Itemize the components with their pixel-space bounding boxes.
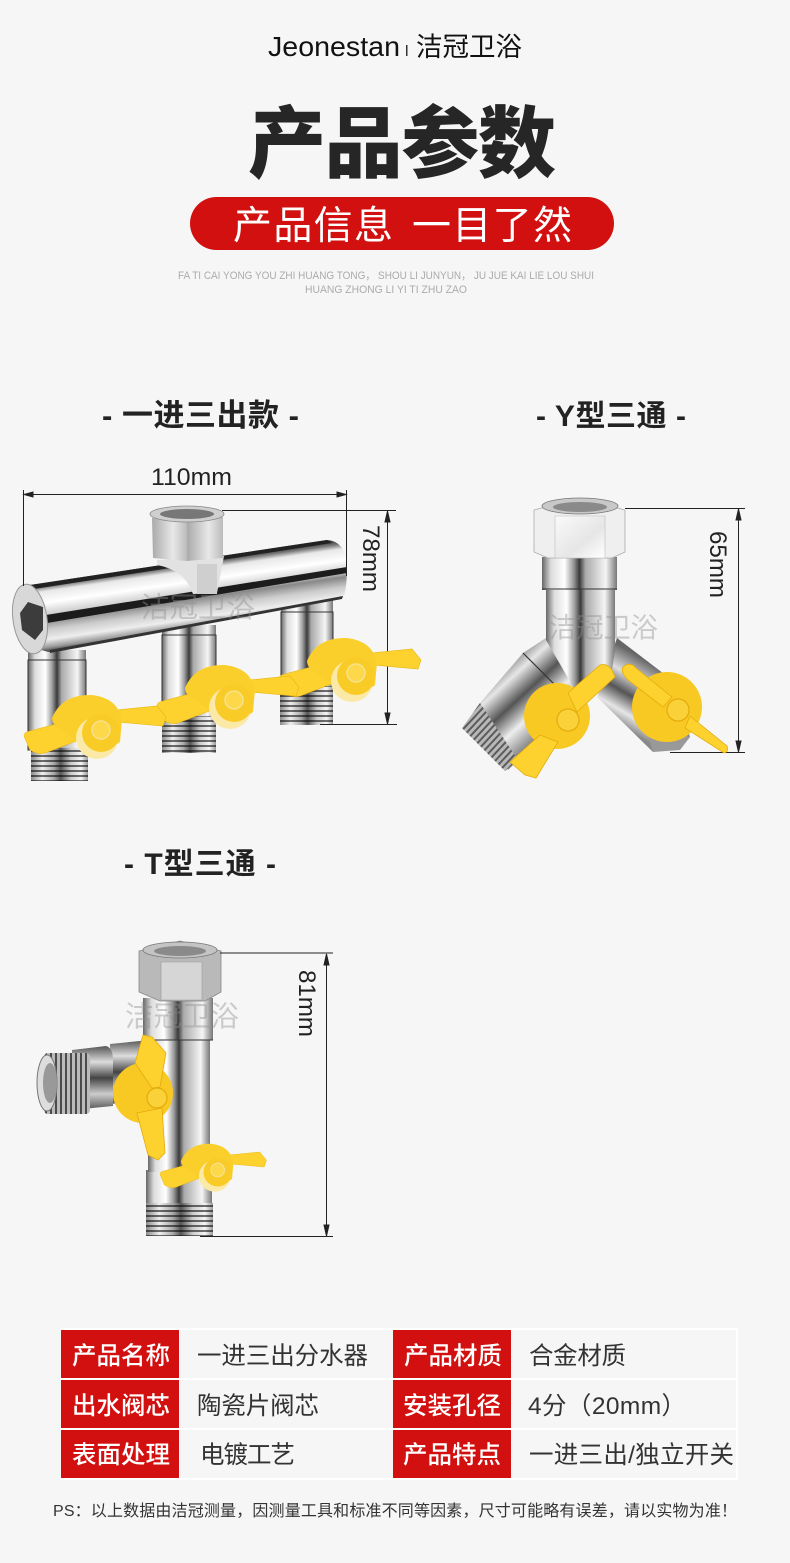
product: one-in three-out manifold (8, 464, 421, 781)
tube (20, 540, 347, 653)
label text: 产品特点 (403, 1441, 501, 1469)
subtitle pill: 产品信息 (233, 205, 393, 248)
right handle (622, 664, 728, 753)
hex nut and base (150, 506, 224, 594)
yellow handles (24, 638, 421, 759)
heading: one-in three-out: - 一进三出款 - (102, 398, 299, 433)
red label cells (61, 1330, 511, 1478)
label text: 出水阀芯 (72, 1392, 170, 1420)
hex nut (534, 498, 625, 558)
tube end with hex socket (8, 582, 52, 656)
subtitle pill (190, 197, 614, 250)
pinyin caption (178, 270, 594, 296)
pinyin caption: FA TI CAI YONG YOU ZHI HUANG TONG， SHOU LI JUNYUN， JU JUE KAI LIE LOU SHUI (178, 270, 594, 282)
side handle (113, 1035, 173, 1160)
value text: 电镀工艺 (200, 1441, 295, 1469)
product: Y type: 65mm (704, 531, 731, 598)
label text (72, 1342, 502, 1469)
parameter table (60, 1328, 738, 1480)
left arm (462, 632, 590, 771)
value text: 一进三出/独立开关 (529, 1441, 734, 1469)
right arm (597, 638, 690, 752)
dimension: 110mm (24, 490, 346, 586)
side arm (37, 1040, 150, 1114)
title: 产品参数 (248, 100, 556, 188)
product: Y type (462, 498, 745, 778)
brand logo: 洁冠卫浴 (416, 32, 522, 62)
product: one-in three-out manifold: 110mm (151, 464, 232, 491)
legs (28, 600, 333, 781)
watermark: 洁冠卫浴 (141, 592, 255, 624)
value text: 陶瓷片阀芯 (197, 1392, 319, 1420)
pinyin caption: HUANG ZHONG LI YI TI ZHU ZAO (305, 284, 467, 296)
value text: 合金材质 (529, 1342, 626, 1370)
watermark: 洁冠卫浴 (549, 612, 658, 643)
neck and body (542, 557, 617, 700)
heading: T type: - T型三通 - (124, 848, 276, 881)
value text: 一进三出分水器 (197, 1342, 368, 1370)
dimension: 81mm (200, 953, 333, 1236)
product: one-in three-out manifold: 78mm (357, 525, 384, 592)
product: T type: 81mm (293, 970, 320, 1037)
watermark: 洁冠卫浴 (125, 1001, 239, 1033)
value text (197, 1342, 734, 1469)
label text: 安装孔径 (403, 1392, 501, 1420)
lower handle (160, 1144, 266, 1192)
label text: 表面处理 (72, 1441, 170, 1469)
label text: 产品材质 (404, 1342, 502, 1370)
dimension: 65mm (625, 508, 745, 752)
hex nut (139, 941, 221, 1001)
value text: 4分（20mm） (528, 1392, 686, 1420)
brand logo: Jeonestan (268, 31, 400, 62)
table grid (60, 1328, 738, 1480)
dimension: 78mm (222, 510, 397, 724)
left handle (510, 664, 615, 778)
footnote: PS：以上数据由洁冠测量，因测量工具和标准不同等因素，尺寸可能略有误差，请以实物为准！ (53, 1502, 737, 1520)
brand logo (268, 31, 522, 62)
subtitle pill: 一目了然 (412, 205, 572, 248)
label text: 产品名称 (72, 1342, 170, 1370)
body (143, 998, 213, 1236)
product: T type (37, 941, 333, 1236)
heading: Y type: - Y型三通 - (536, 400, 686, 433)
